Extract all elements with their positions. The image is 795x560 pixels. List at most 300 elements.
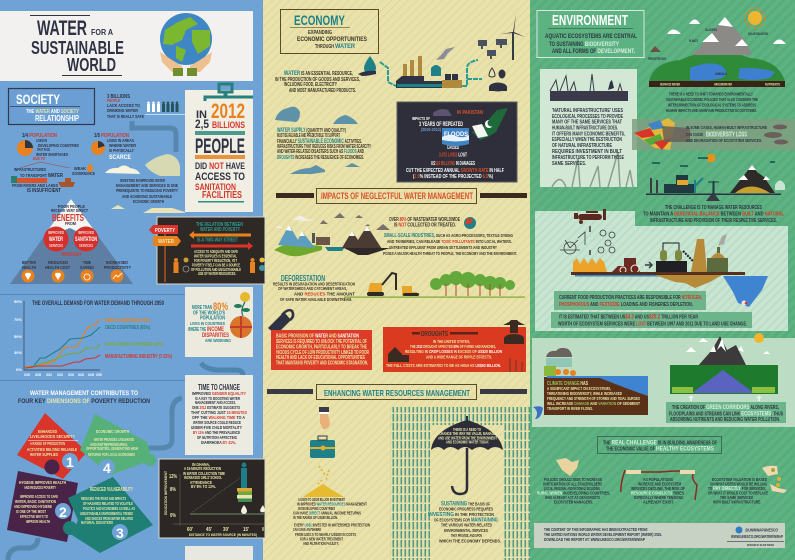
panel: ghana chart: EDUCATION IMPROVEMENT [164,470,168,515]
text: policies: RURAL WOMEN IN DEVELOPING COUNTRIES, [537,490,610,496]
puzzle piece 2: 2 [59,504,67,520]
text: the challenge [643,205,784,224]
icon: pipe [201,363,243,376]
panel: relation between water and poverty: USE OF WATER RESOURCES. [198,271,236,276]
icon: floods: FLOODS [444,132,468,138]
icon: plane [574,209,606,224]
causes of shortage: INFRASTRUCTURES [14,167,46,172]
panel: environment heading [537,10,644,58]
text: valuation [708,477,768,504]
panel: biodiversity loss: BIODIVERSITY LOSS [706,132,747,138]
line chart: water demand: 2020 [57,373,63,377]
icon: storm clouds and rain [544,348,576,376]
text: investing: MANAGEMENT AND SERVICES IS ONE [116,183,178,188]
panel: sanitation statistic: 2012 [211,100,245,123]
pyramid: benefits: HEALTH COST [45,265,70,270]
panel: ghana chart: INCREASED GIRLS' SCHOOL [184,475,222,480]
text: umbrella: THERE IS A NEED TO [453,427,481,432]
icon: earth [464,217,476,229]
arrow: right [191,242,253,250]
text: policies [537,477,610,504]
text: sustaining: WHICH THE ECONOMY DEPENDS. [439,538,501,544]
puzzle: dimensions of poverty reduction [7,413,156,553]
panel: pakistan floods: (2.9% INSTEAD OF THE PROJECTED 6.5%) [413,174,493,180]
callout: climate change: TRANSPORT IN RIVER FLOWS. [547,406,593,411]
callout: nutrients: CURRENT FOOD PRODUCTION PRACTICES ARE RESPONSIBLE FOR NITROGEN, [559,295,702,301]
panel: natural infrastructure: 'NATURAL INFRASTRUCTURE' USES [552,108,624,114]
heading: poverty dimensions [18,390,150,405]
panel: time to change: TIME TO CHANGE [198,383,240,392]
panel: ghana chart: ATTENDANCE [190,480,212,485]
text: populations [631,477,685,504]
panel: basic provision: BASIC PROVISION OF WATER AND SANITATION [276,334,359,340]
icon: handshake [556,458,579,476]
panel: time to change: WATER SOURCE COULD REDUCE [193,420,241,425]
panel: time to change: OFF THE WALKING TIME TO A [192,415,246,420]
panel: ghana chart: 0% [170,513,176,519]
panel: natural infrastructure: SAME SERVICES. [552,161,586,167]
causes of shortage [11,162,95,194]
panel: natural infrastructure: INFRASTRUCTURE TO PERFORM THOSE [552,155,624,161]
text: investing: PREREQUISITE TO REDUCING POVERTY [116,188,178,193]
illustration: aquatic ecosystem: NUTRIENTS [765,82,780,86]
callout: green corridors: FLOODPLAINS AND STREAMS CAN LINK ECOSYSTEMS, THUS [669,412,783,418]
panel: time to change: OF NUTRITION-AFFECTING [197,435,237,440]
panel: economy heading: ECONOMY [294,12,345,28]
causes of shortage: FROM RIVERS AND LAKES [12,183,58,188]
puzzle piece 3: OF HAZARDS RELATED TO VOLATILE [83,501,133,506]
callout: nutrients [554,291,706,310]
line chart: water demand: 2040 [78,373,84,377]
text: one fifth population: 1/5 POPULATION [94,133,129,139]
text: wastewater [389,217,460,228]
line chart: water demand: 2050 [96,373,102,377]
puzzle piece 3: POLITICS AND ECONOMIES AS WELL AS [83,506,135,511]
panel: pakistan floods: 3 YEARS OF REPEATED [419,122,463,128]
icon: people row [145,102,185,115]
icon: food [489,68,507,92]
line chart: water demand: OECD COUNTRIES (65%) [105,325,150,331]
text: one quarter population: THAT FACE [37,147,50,152]
panel: economy heading [280,10,378,54]
line chart: water demand: 90% [14,300,23,304]
title [31,17,124,75]
text: sustaining: ECONOMIC PROGRESS REQUIRES [439,506,493,512]
panel: ghana chart: IN GHANA, [192,462,210,467]
illustration: deforestation machinery and trees [344,271,525,298]
sign: water: WATER [158,239,174,245]
text: umbrella [438,427,497,444]
panel: time to change [185,375,253,455]
puzzle piece 3 [63,477,153,553]
text: investment: IN THE RANGE OF US$60 BILLION. [293,515,338,520]
panel: relation between water and poverty: THE RELATION BETWEEN [196,222,243,228]
text: sustaining [428,502,501,544]
icon: blue leaf [533,406,543,419]
3 billions text: THAT IS REALLY SAFE [107,114,144,119]
text: one quarter population: 1/4 POPULATION [22,133,57,139]
panel: natural infrastructure: ESPECIALLY WHEN THE DESTRUCTION [552,137,622,143]
puzzle piece 2: AND IMPROVED HYGIENE [14,504,52,509]
text: water supply: FINANCIALLY SUSTAINABLE ECONOMIC ACTIVITIES. [277,139,362,145]
text: water supply [277,128,371,161]
icon: globe in hands [160,13,212,76]
line chart: water demand: DEVELOPING COUNTRIES (46%) [105,342,163,348]
panel: pakistan floods: (2010-2012) [421,127,441,132]
puzzle piece 1: WATER SUPPLIES [30,452,58,457]
panel: relation between water and poverty: IS A TWO-WAY STREET [197,238,238,244]
text: one quarter population: LIVED IN [36,138,47,143]
pyramid: benefits [10,199,133,284]
panel: pakistan floods: US$16 BILLIONS IN DAMAGES [431,161,475,167]
text: one quarter population: DUE TO [33,156,45,161]
icon: withered plants [510,358,522,372]
pyramid: benefits: IMPROVED [78,230,94,235]
puzzle piece 3: UNSUSTAINABLE ENVIRONMENTAL TRENDS [80,511,133,516]
panel: natural infrastructure: OF NATURAL INFRASTRUCTURE [552,143,613,149]
illustration: wheat, tractor, factory [571,234,768,307]
text: investment: AND FILTRATION FACILITY. [303,541,339,546]
panel: pakistan floods: CAUSED [447,145,459,151]
panel: natural infrastructure: MANY OF THE SAME SERVICES THAT [552,120,622,126]
heading: enhancing water resources management: ENHANCING WATER RESOURCES MANAGEMENT [324,388,471,398]
pyramid: benefits: SERVICES [79,243,93,248]
text: populations: INCREASE AND ECOSYSTEM [638,482,681,486]
puzzle piece 1: ENHANCED [38,429,57,434]
illustration: aquatic ecosystem: GLACIERS [705,28,717,32]
3 billions text: DRINKING WATER [107,108,139,113]
callout: climate change: WILL INCREASE DAMAGE AND VARIATION OF SEDIMENT [547,401,640,406]
text: investment: A US$75 TO US$30 BILLION INVESTMENT [298,497,345,502]
puzzle piece 2: HYGIENE IMPROVES HEALTH [19,480,66,485]
callout: climate change [544,376,648,415]
pyramid: benefits: POOR PEOPLE [58,204,85,209]
clouds [275,107,360,174]
panel: blank lower card [185,546,253,560]
panel: time to change: IS A KEY TO BOOSTING WATER [195,396,241,401]
puzzle piece 4: AND ENTREPRENEURIAL [90,442,128,447]
panel: economy heading: THROUGH [315,44,334,50]
panel: society heading: THE WATER AND SOCIETY [26,109,80,115]
panel: pakistan floods: CUT THE EXPECTED ANNUAL GROWTH RATE IN HALF [406,168,504,174]
line chart: water demand: BRICS COUNTRIES (70%) [105,318,150,324]
text: populations: SERVICES DECLINE, THE RISK OF [631,486,685,491]
panel: footer credits: @UNWWAPUNESCO [745,528,778,532]
text: investment: IN IMPROVED WATER RESOURCES MANAGEMENT [297,502,367,506]
puzzle piece 1: A RANGE OF PRODUCTION [30,441,65,446]
text: populations: RESOURCE CONFLICTS RISES [631,490,684,496]
callout: the real challenge [598,436,722,454]
puzzle piece 2: AND REDUCES POVERTY [24,485,56,490]
panel: income disparities: WHERE THE [188,327,206,333]
panel: relation between water and poverty: ACCESS TO ADEQUATE AND SAFE [194,249,238,254]
callout: climate change: A SIGNIFICANT IMPACT ON ECOSYSTEMS, [547,386,611,391]
panel: time to change: DIARRHOEA BY 41%. [201,440,236,445]
callout: lost value [551,312,752,328]
text: policies: PARTICIPATION OF ALL STAKEHOLDERS [543,482,602,486]
panel: relation between water and poverty: WATER AND POVERTY [200,227,240,233]
panel: droughts: THE FULL COSTS ARE ESTIMATED TO BE AS HIGH AS US$50 BILLION. [386,363,501,369]
pyramid: benefits: FROM [65,221,76,226]
puzzle piece 4: ECONOMIC GROWTH [96,429,129,434]
pyramid: benefits: SERVICES [49,243,63,248]
callout: lost value: IT IS ESTIMATED THAT BETWEEN US$4.3 AND US$20.2 TRILLION PER YEAR [559,314,698,320]
panel: natural infrastructure: ECOLOGICAL PROCESSES TO PROVIDE [552,114,623,120]
heading: impacts of neglectful water management: IMPACTS OF NEGLECTFUL WATER MANAGEMENT [321,191,473,201]
text: water supply: AND WATER-RELATED DISASTERS SUCH AS FLOODS AND [277,149,364,155]
panel: time to change: MANAGEMENT AND ACCESS. [195,400,236,405]
illustration: rain and umbrella [390,407,530,560]
illustration: aquatic ecosystem: SURFACE WATER [660,82,680,86]
illustration: aquatic ecosystem: PLANTS [689,39,698,43]
panel: basic provision: THAT MAINTAINS POVERTY AND ECONOMIC STAGNATION. [276,360,368,366]
text: one quarter population: WATER SHORTAGES [36,152,68,157]
illustration: aquatic ecosystem: SOLAR RADIATION [748,32,768,36]
title: WORLD [67,55,116,75]
panel: ghana chart: 45' [206,527,212,533]
sign: poverty: POVERTY [155,228,176,234]
puzzle piece 2: IMPROVED ACCESS TO SAFE [20,494,58,499]
panel: time to change: THAT CUTTING JUST 15 MINUTES [191,410,247,415]
icon: sun [745,8,765,28]
text: one quarter population [22,133,79,161]
panel: time to change: UNDER-FIVE CHILD MORTALITY [191,425,242,430]
icon: faucet [205,84,253,101]
text: water essential [275,70,360,94]
text: valuation: ECOSYSTEM VALUATION IS BASED [712,477,767,482]
callout: green corridors: THE CREATION OF GREEN CORRIDORS ALONG RIVERS, [672,405,779,411]
text: policies: POLICIES SHOULD SEEK TO INCREASE [544,477,602,482]
puzzle piece 2: WATER, BASIC SANITATION [15,499,56,504]
illustration: wetland with bird [550,74,628,101]
panel: biodiversity loss [632,118,795,150]
icon: barn [388,347,409,362]
pyramid: benefits: SAVING [80,265,94,270]
illustration: water to industry [358,47,482,88]
line chart: water demand [14,300,172,377]
text: deforestation [273,274,355,302]
heading: poverty dimensions: WATER MANAGEMENT CONTRIBUTES TO [30,390,138,397]
text: sustaining: SUSTAINING THE BASIS OF [441,502,490,508]
puzzle piece 3: REDUCING THE RISKS AND IMPACTS [81,496,126,501]
text: water essential: WATER IS AN ESSENTIAL RESOURCE, [284,70,353,77]
panel: natural infrastructure: IT OFFERS MANY ECONOMIC BENEFITS, [552,132,625,138]
panel: income disparities: MORE THAN [192,305,212,311]
panel: climate change and green corridors [532,333,795,427]
text: populations: ESPECIALLY WHERE TENSIONS [634,495,683,500]
panel: footer credits: THE UNITED NATIONS WORLD WATER DEVELOPMENT REPORT (WWDR) 2015. [544,532,662,537]
panel: sanitation statistic: IN [196,109,207,121]
icon: plant with coin [230,292,252,338]
line chart: water demand: 2030 [68,373,74,377]
3 billions text [107,94,144,119]
panel: pakistan floods: 3,072 LIVES LOST [439,152,467,158]
heading: poverty dimensions: FOUR KEY DIMENSIONS OF POVERTY REDUCTION [18,398,150,405]
panel: footer credits: DESIGNED BY MAJOR TOKENS [747,543,774,547]
text: investment: CAN HAVE DIRECT ANNUAL INCOME RETURNS [293,510,361,516]
panel: relation between water and poverty [149,217,265,284]
panel: droughts: IN THE UNITED STATES, [433,339,470,344]
causes of shortage: WEAK [74,166,87,171]
panel: pakistan floods: IMPACTS OF [412,116,430,121]
line chart: water demand: MANUFACTURING INDUSTRY (7-22%) [105,354,172,360]
3 billions text: 3 BILLIONS [107,94,131,100]
panel: economy heading: EXPANDING [308,30,332,36]
panel: ghana chart: 8% [170,487,176,493]
pyramid: benefits: IMPROVED [48,230,64,235]
panel: basic provision [271,330,372,370]
panel: droughts: RESULTING IN CROP LOSSES IN EXCESS OF US$20 BILLION [405,349,502,354]
text: investment [293,497,370,546]
panel: income disparities: LIVES IN COUNTRIES [190,321,225,326]
text: wastewater: OVER 80% OF WASTEWATER WORLDWIDE [389,217,460,223]
panel: pakistan floods: IN PAKISTAN [457,110,483,116]
panel: society heading: SOCIETY [16,91,60,107]
text: umbrella: AND USE WATER FROM THE ENVIRONMENT [438,436,497,440]
text: small scale industries: SMALL-SCALE INDUSTRIES, SUCH AS AGRO-PROCESSORS, TEXTILE DYEING [384,233,513,239]
text: shift to environmentally sustainable [666,92,758,113]
panel: environment heading: AND ALL FORMS OF DEVELOPMENT. [552,48,635,55]
panel: biodiversity loss: AND DEGRADATION OF ECOSYSTEM SERVICES. [686,138,762,143]
heading: impacts of neglectful water management [276,188,527,204]
illustration: green corridors [670,333,778,401]
icon: girl on books [237,462,252,502]
panel: environment heading: TO SUSTAINING BIODIVERSITY [549,41,619,48]
panel: ghana chart: 12% [169,474,177,480]
line chart: water demand: 0% [16,368,23,372]
panel: environment heading: ENVIRONMENT [552,12,628,29]
text: valuation: ON WHAT USERS WOULD BE WILLING [710,482,767,486]
text: investing: AND ACHIEVING SUSTAINABLE [122,194,172,199]
text: water essential: AND MOST MANUFACTURED PRODUCTS. [289,88,356,94]
text: sustaining: INVESTING IN THE PROTECTION [428,512,494,518]
panel: natural infrastructure: HUMAN-BUILT INFRASTRUCTURE DOES. [552,126,618,132]
icon: pipes [132,121,176,152]
text: sustaining: THE VARIOUS WATER-RELATED [441,522,492,528]
icon: coins and hands [762,466,787,493]
puzzle piece 4: 4 [103,460,111,476]
illustration: aquatic ecosystem: GROUNDWATER [714,82,732,86]
line chart: water demand: 2010 [46,373,52,377]
puzzle piece 4: WATER PROVIDES LIVELIHOOD [94,437,134,442]
text: sustaining: THEY PROVIDE, AND UPON [451,533,482,538]
panel: footer credits: THE CONTENT OF THIS INFOGRAPHIC HAS BEEN EXTRACTED FROM: [544,527,648,532]
text: investing: INVESTING IN IMPROVED WATER [120,178,166,183]
callout: the real challenge: THE REAL CHALLENGE IS IN BUILDING AWARENESS OF [603,440,717,446]
text: deforestation: AND REDUCES THE AMOUNT [294,292,355,296]
text: investment: FOR A NEW WATER TREATMENT [300,536,343,542]
callout: green corridors [666,402,786,423]
callout: climate change: THREATENING BIODIVERSITY, WHILE INCREASED [547,391,622,396]
text: deforestation: OF SAFE WATER AVAILABLE DOWNSTREAM. [280,297,352,302]
text: umbrella: CHANGE THE WAY WE VALUE, MANAGE [439,431,496,436]
panel: natural infrastructure [540,69,637,187]
line chart: water demand: 2000 [24,373,30,377]
puzzle piece 4 [80,414,156,476]
puzzle piece 2: IS ONE OF THE MOST [16,509,46,514]
callout: the real challenge: THE ECONOMIC VALUE OF HEALTHY ECOSYSTEMS [606,446,714,452]
text: water supply: WATER SUPPLY (QUANTITY AND QUALITY) [277,128,346,134]
panel: income disparities: INCOME [207,327,224,333]
text: sustaining: OF ECOSYSTEMS FOR MAINTAINING [434,518,498,524]
callout: climate change: CLIMATE CHANGE HAS [547,381,588,387]
panel: ghana chart: IN WATER COLLECTION TIME [183,471,225,476]
text: valuation: OR WHAT IT WOULD COST TO REPLACE [708,490,768,496]
text: one fifth population: IS PHYSICALLY [109,148,134,153]
text: investment: IN DEVELOPING COUNTRIES [298,506,335,511]
panel: time to change: ONE 2012 ESTIMATE SUGGESTS [192,405,240,410]
icon: farmer [503,320,525,344]
callout: lost value: WORTH OF ECOSYSTEM SERVICES WERE LOST BETWEEN 1997 AND 2011 DUE TO LAND USE CHANGE. [558,322,747,328]
icon: padlock [268,310,293,335]
line chart: water demand: 2005 [35,373,41,377]
panel: basic provision: HEALTH AND LACK OF EDUCATIONAL OPPORTUNITIES [276,355,365,361]
panel: economy heading: ECONOMIC OPPORTUNITIES [297,37,367,43]
text: one fifth population [94,133,137,161]
callout: nutrients: PHOSPHOROUS AND PESTICIDE LOADING AND FISHERIES DEPLETION. [559,302,693,308]
text: valuation: TO PAY DIRECTLY FOR SERVICES, [708,486,766,492]
arrow: left [189,231,251,239]
text: shift to environmentally sustainable: THERE IS A NEED TO SHIFT TOWARDS ENVIRONMENTALLY [669,92,753,96]
puzzle piece 3: 3 [116,525,124,541]
puzzle piece 1: LIVELIHOODS SECURITY [30,434,75,439]
text: policies: (LOCAL, REGIONAL AND NATIONAL) INCLUDING [544,486,600,491]
panel: droughts: AND A WIDE RANGE OF RIPPLE EFFECTS. [426,354,492,360]
puzzle piece 3: NATURAL DISASTERS [81,520,113,525]
panel: biodiversity loss: CAN CAUSE [686,132,703,137]
panel: income disparities [185,287,253,357]
causes of shortage: GOVERNANCE [72,171,95,176]
panel: income disparities: 80% [213,301,228,313]
icon: pesticide molecules [560,230,615,254]
pyramid: benefits: BENEFITS [52,213,84,224]
illustration: aquatic ecosystem: PRECIPITATION [648,57,666,61]
icon: pakistan map [472,108,508,140]
text: one fifth population: WHERE WATER [109,143,137,148]
text: one quarter population: DEVELOPING COUNTRIES [38,143,79,148]
panel: basic provision: SERVICES IS REQUIRED TO UNLOCK THE POTENTIAL OF [276,339,367,345]
panel: ghana chart: DISTANCE TO WATER SOURCE (IN MINUTES) [189,533,258,537]
icon: pipe [147,398,182,448]
heading: enhancing water resources management [267,384,527,400]
panel: droughts: DROUGHTS [421,329,448,338]
panel: relation between water and poverty: WATER SUPPLIES IS ESSENTIAL [194,254,237,258]
puzzle piece 1: 1 [66,454,74,470]
text: investing [116,178,178,204]
panel: ghana chart: 30' [223,527,229,533]
panel: income disparities: OF THE WORLD'S [193,310,225,316]
line chart: water demand: 30% [14,351,23,355]
line chart: water demand: 70% [14,318,23,322]
panel: sanitation statistic: 2,5 [195,117,209,131]
icon: solar panels [478,39,507,59]
text: the challenge: TO MAINTAIN A BENEFICIAL BALANCE BETWEEN BUILT AND NATURAL [643,212,784,218]
panel: biodiversity loss: IN SOME CASES, HUMAN-BUILT INFRASTRUCTURE [686,125,767,130]
text: water supply: INFRASTRUCTURE THAT REDUCES RISKS FROM WATER SCARCITY [277,144,371,150]
illustration: aquatic ecosystem [648,8,786,87]
panel: environment heading: AQUATIC ECOSYSTEMS ARE CENTRAL [545,34,637,40]
pyramid: benefits: TIME [83,260,91,265]
panel: sanitation statistic: BILLIONS [212,120,245,130]
text: deforestation: OF WATERSHEDS AND CATCHMENT AREAS, [278,286,347,291]
panel: society heading [8,88,94,124]
panel: sanitation statistic: PEOPLE [195,135,245,158]
panel: sanitation statistic: ACCESS TO [195,171,245,183]
puzzle piece 4: RETURNS FOR LOCAL ECONOMIES [88,452,135,457]
text: investment: FROM US$7.5 TO NEARLY US$200 IN COSTS [295,532,356,537]
pyramid: benefits: THROUGH [61,252,81,258]
panel: basic provision: ECONOMIC GROWTH, PARTICULARLY TO BREAK THE [276,344,367,350]
